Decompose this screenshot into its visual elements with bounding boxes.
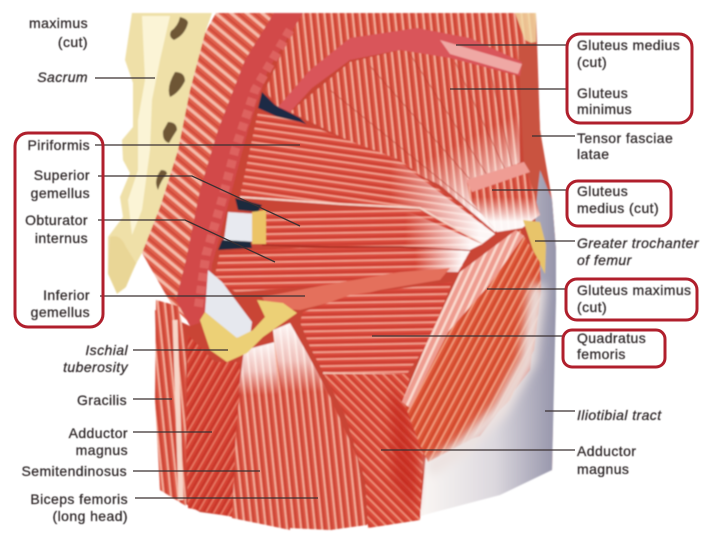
callout: gluteus maximus box — [566, 279, 697, 320]
muscle: strap of gluteus maximus (cut) — [176, 13, 303, 326]
label: gluteus maximus cut: Gluteus maximus — [577, 282, 691, 298]
label: tensor fasciae latae: latae — [577, 146, 609, 162]
muscle backing silhouette — [155, 13, 556, 530]
label: gracilis: Gracilis — [77, 392, 127, 408]
label: adductor magnus right: magnus — [577, 461, 629, 477]
tract edge right — [420, 170, 556, 516]
label: tensor fasciae latae: Tensor fasciae — [577, 130, 673, 146]
label: biceps femoris: (long head) — [53, 508, 128, 524]
muscle: gluteus maximus (cut) — [404, 230, 541, 462]
bone: sacrum — [108, 13, 212, 294]
label: adductor magnus left: Adductor — [69, 425, 128, 441]
label: obturator internus: Obturator — [25, 212, 88, 228]
muscle: quadratus femoris — [300, 282, 452, 375]
dark gaps under piriformis — [218, 198, 262, 250]
callout: quadratus femoris box — [563, 330, 665, 367]
label: iliotibial tract: Iliotibial tract — [577, 407, 662, 423]
tendon: ischial white band — [205, 270, 252, 338]
label: superior gemellus: Superior — [34, 167, 90, 183]
muscle: adductor magnus left — [186, 335, 240, 518]
label: ischial tuberosity: Ischial — [85, 342, 128, 358]
label: inferior gemellus: Inferior — [43, 287, 90, 303]
label: gluteus maximus cut: (cut) — [577, 299, 607, 315]
label: gluteus medius cut: medius (cut) — [577, 200, 659, 216]
muscle: piriformis — [240, 112, 495, 244]
muscle: gluteus maximus cut strap — [402, 230, 524, 408]
callout: gluteus medius and minimus box — [567, 34, 692, 123]
muscle: semitendinosus — [232, 342, 290, 530]
label: gluteus maximus cut top left: maximus — [29, 15, 88, 31]
label: greater trochanter: Greater trochanter — [577, 235, 699, 251]
label: sacrum: Sacrum — [37, 69, 88, 85]
muscle: tensor fasciae latae — [518, 42, 549, 226]
label: quadratus femoris: Quadratus — [577, 330, 646, 346]
label: biceps femoris: Biceps femoris — [30, 491, 128, 507]
label: greater trochanter: of femur — [577, 252, 633, 268]
muscle: obturator internus lower — [214, 248, 470, 292]
label: gluteus minimus: minimus — [577, 101, 632, 117]
label: gluteus medius cut top right: (cut) — [577, 54, 607, 70]
callout: gluteus medius box — [567, 181, 671, 226]
muscle: gluteus minimus — [290, 50, 522, 232]
bone: ischial tuberosity — [200, 300, 297, 362]
label: obturator internus: internus — [35, 230, 88, 246]
label: adductor magnus left: magnus — [76, 442, 128, 458]
label: gluteus medius cut: Gluteus — [577, 183, 628, 199]
muscle: left striated sacral fibres — [142, 13, 275, 325]
bone: greater trochanter — [523, 220, 546, 274]
label: gluteus medius cut top right: Gluteus medius — [577, 37, 680, 53]
anatomical illustration — [108, 13, 556, 530]
muscle: gluteus medius cut stump — [466, 162, 540, 232]
label: piriformis: Piriformis — [27, 137, 90, 153]
label: superior gemellus: gemellus — [31, 185, 90, 201]
muscle: gluteus medius cut arc — [278, 28, 522, 112]
label: gluteus maximus cut top left: (cut) — [58, 34, 88, 50]
label: quadratus femoris: femoris — [577, 346, 626, 362]
muscle: gracilis strip — [155, 300, 186, 506]
label: adductor magnus right: Adductor — [577, 443, 636, 459]
label: semitendinosus: Semitendinosus — [22, 463, 127, 479]
leader lines — [95, 45, 575, 498]
tract blend over muscle edge — [428, 285, 538, 470]
muscle: biceps femoris — [273, 323, 367, 530]
muscle: superior gemellus and obturator tendon — [224, 209, 482, 251]
label: ischial tuberosity: tuberosity — [63, 359, 129, 375]
label: gluteus minimus: Gluteus — [577, 85, 628, 101]
muscle: adductor magnus centre — [324, 374, 424, 528]
muscle: gluteus medius fan upper — [265, 13, 536, 108]
muscle: inferior gemellus — [262, 268, 450, 310]
callout: left labels box — [15, 133, 103, 327]
dark gap near sacrum — [258, 92, 310, 128]
label: inferior gemellus: gemellus — [31, 304, 90, 320]
